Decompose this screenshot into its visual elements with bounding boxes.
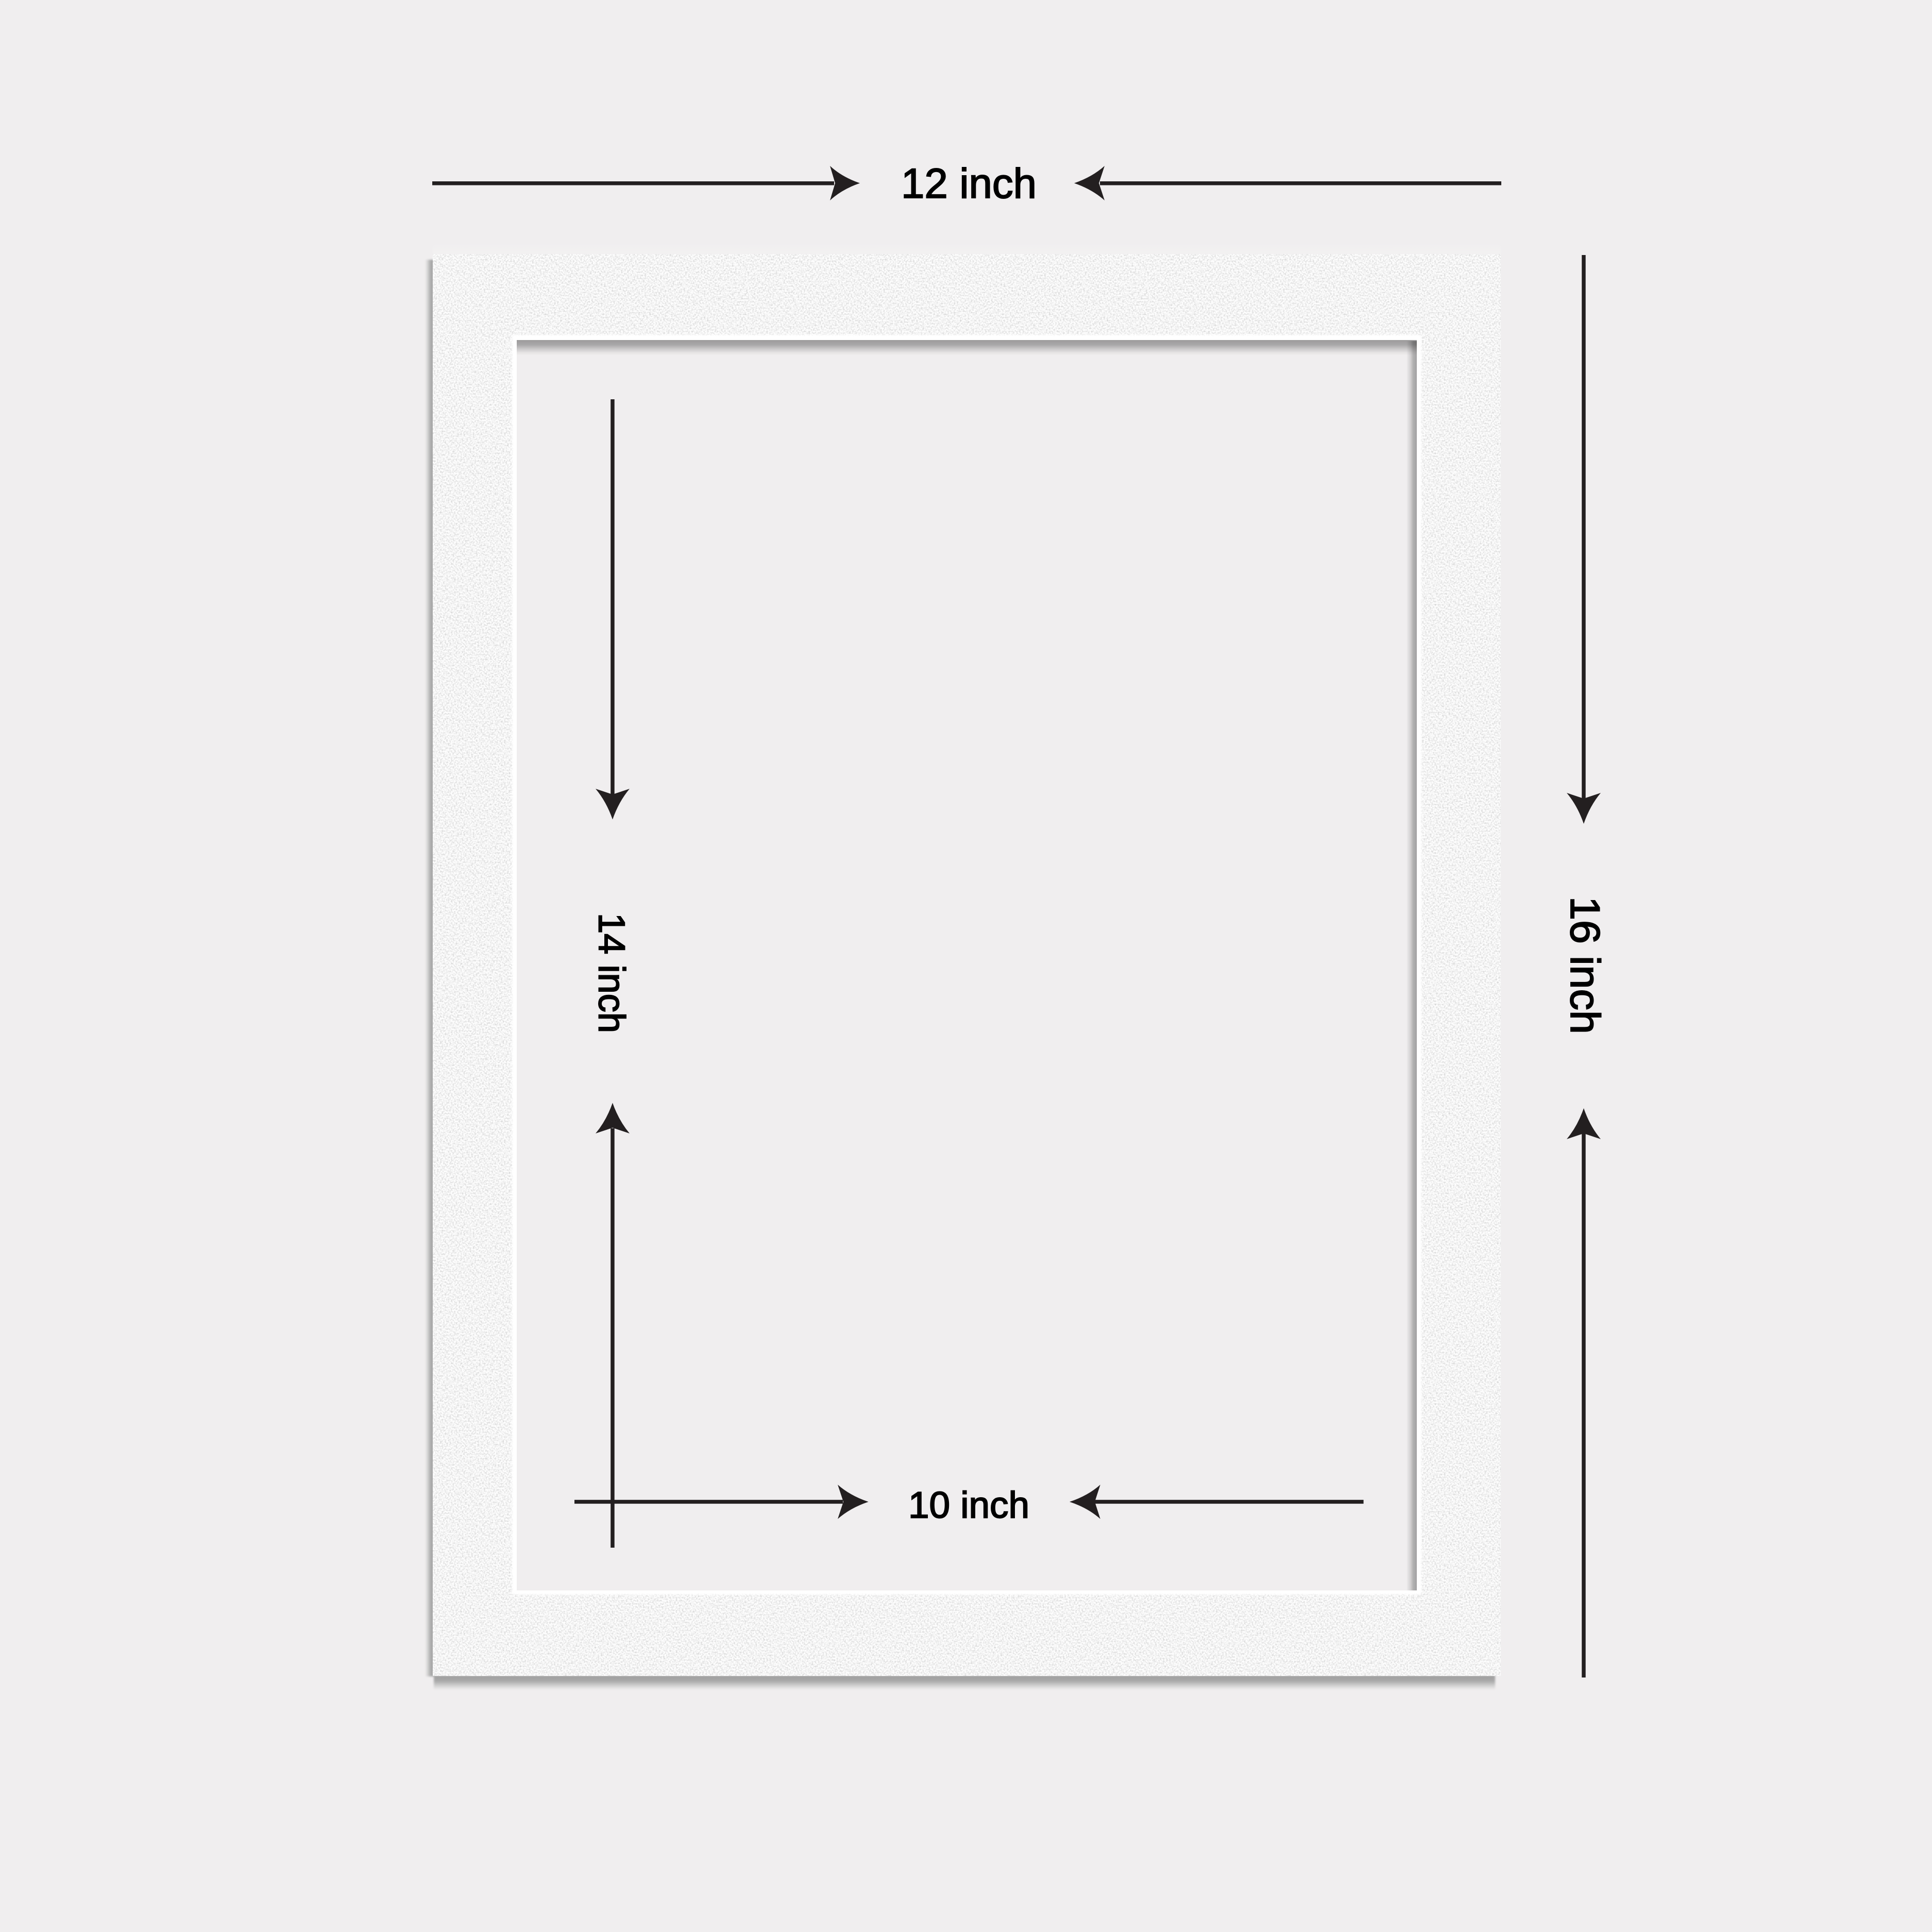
label: 14 inch height: 14 inch <box>591 913 632 1033</box>
arrow: inner width, left part <box>574 1485 869 1519</box>
window opening <box>517 340 1417 1590</box>
arrow: top width, left part <box>432 166 860 200</box>
mat board surface <box>433 254 1501 1676</box>
mat outer edge shadows <box>425 243 1501 1690</box>
panel: white mat board frame with window cut-out <box>425 243 1501 1690</box>
arrow: inner width, right part <box>1070 1485 1364 1519</box>
white bevel around window <box>512 335 1421 1595</box>
arrow: inner height, upper part <box>596 399 630 820</box>
heading: 12 inch width label: 12 inch <box>901 160 1037 207</box>
label: 10 inch width: 10 inch <box>908 1485 1029 1526</box>
label: 16 inch height: 16 inch <box>1562 896 1608 1034</box>
window inner shadows <box>517 340 1417 1590</box>
arrow: top width, right part <box>1074 166 1501 200</box>
arrow: inner height, lower part <box>596 1103 630 1548</box>
arrow: outer height, lower part <box>1567 1108 1601 1677</box>
arrow: outer height, upper part <box>1567 255 1601 824</box>
